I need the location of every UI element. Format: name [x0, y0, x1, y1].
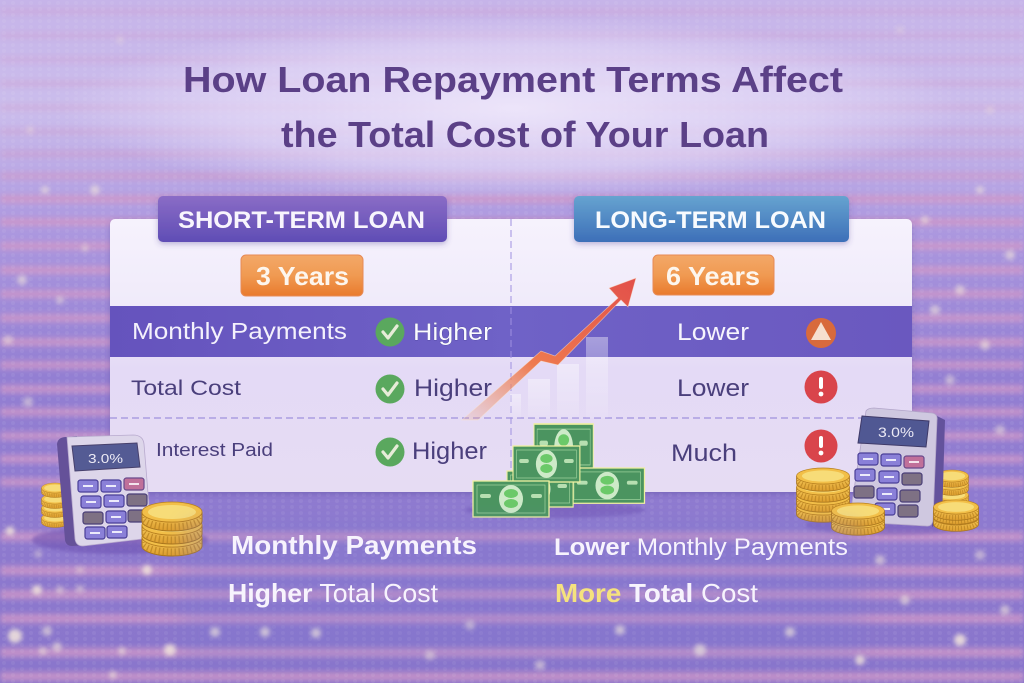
calculator body [932, 415, 945, 527]
summary: long-term [554, 534, 848, 608]
long-term values: Much [671, 440, 737, 467]
icon: right calculator and coins: 3.0% [878, 424, 914, 440]
icon: right calculator and coins [797, 408, 978, 535]
icon: alert interest paid [804, 430, 838, 462]
coins behind [42, 483, 68, 528]
title: How Loan Repayment Terms Affect [183, 59, 843, 100]
long-term values: Lower [677, 375, 749, 402]
calculator body [57, 436, 90, 546]
icon: check total cost [376, 374, 404, 404]
chart: rising bars behind arrow [510, 337, 608, 418]
summary: short-term: Monthly Payments [231, 530, 477, 560]
short-term values [376, 318, 492, 466]
summary: short-term: Higher Total Cost [228, 578, 439, 608]
long-term values [671, 318, 838, 467]
coins front [142, 502, 202, 556]
icon: alert total cost [804, 370, 838, 404]
icon: left calculator and coins: 3.0% [88, 451, 124, 466]
row labels: left column: Monthly Payments [132, 318, 347, 344]
summary: short-term [228, 530, 477, 608]
row labels: left column: Total Cost [131, 377, 241, 400]
badge: 6 years: 6 Years [666, 261, 760, 291]
panel: comparison table [110, 219, 912, 492]
short-term values: Higher [414, 375, 492, 402]
badge: 6 years [653, 255, 774, 295]
coins behind [936, 470, 968, 506]
coins right [934, 500, 978, 531]
badge: long-term loan [574, 196, 849, 242]
coins front [832, 503, 884, 535]
badge: short-term loan [158, 196, 447, 242]
arrow: rising cost [462, 278, 636, 420]
summary: long-term: More Total Cost [555, 578, 759, 608]
badge: 3 years [241, 255, 363, 296]
summary panel glow [182, 520, 862, 660]
title: the Total Cost of Your Loan [281, 114, 769, 155]
icon: check interest paid [376, 438, 404, 466]
badge: 3 years: 3 Years [256, 261, 349, 291]
icon: cash stack [465, 424, 645, 518]
row labels: left column: Interest Paid [156, 440, 273, 460]
row labels: left column [131, 318, 347, 460]
badge: long-term loan: LONG-TERM LOAN [595, 207, 826, 234]
icon: check monthly payments [376, 318, 404, 346]
short-term values: Higher [413, 319, 492, 346]
icon: warning triangle [806, 318, 836, 348]
coins left [797, 468, 849, 522]
summary: long-term: Lower Monthly Payments [554, 534, 848, 561]
row: monthly payments band [110, 306, 912, 357]
short-term values: Higher [412, 438, 487, 465]
badge: short-term loan: SHORT-TERM LOAN [178, 207, 425, 234]
icon: left calculator and coins [32, 435, 208, 556]
title [183, 59, 843, 155]
long-term values: Lower [677, 319, 749, 346]
